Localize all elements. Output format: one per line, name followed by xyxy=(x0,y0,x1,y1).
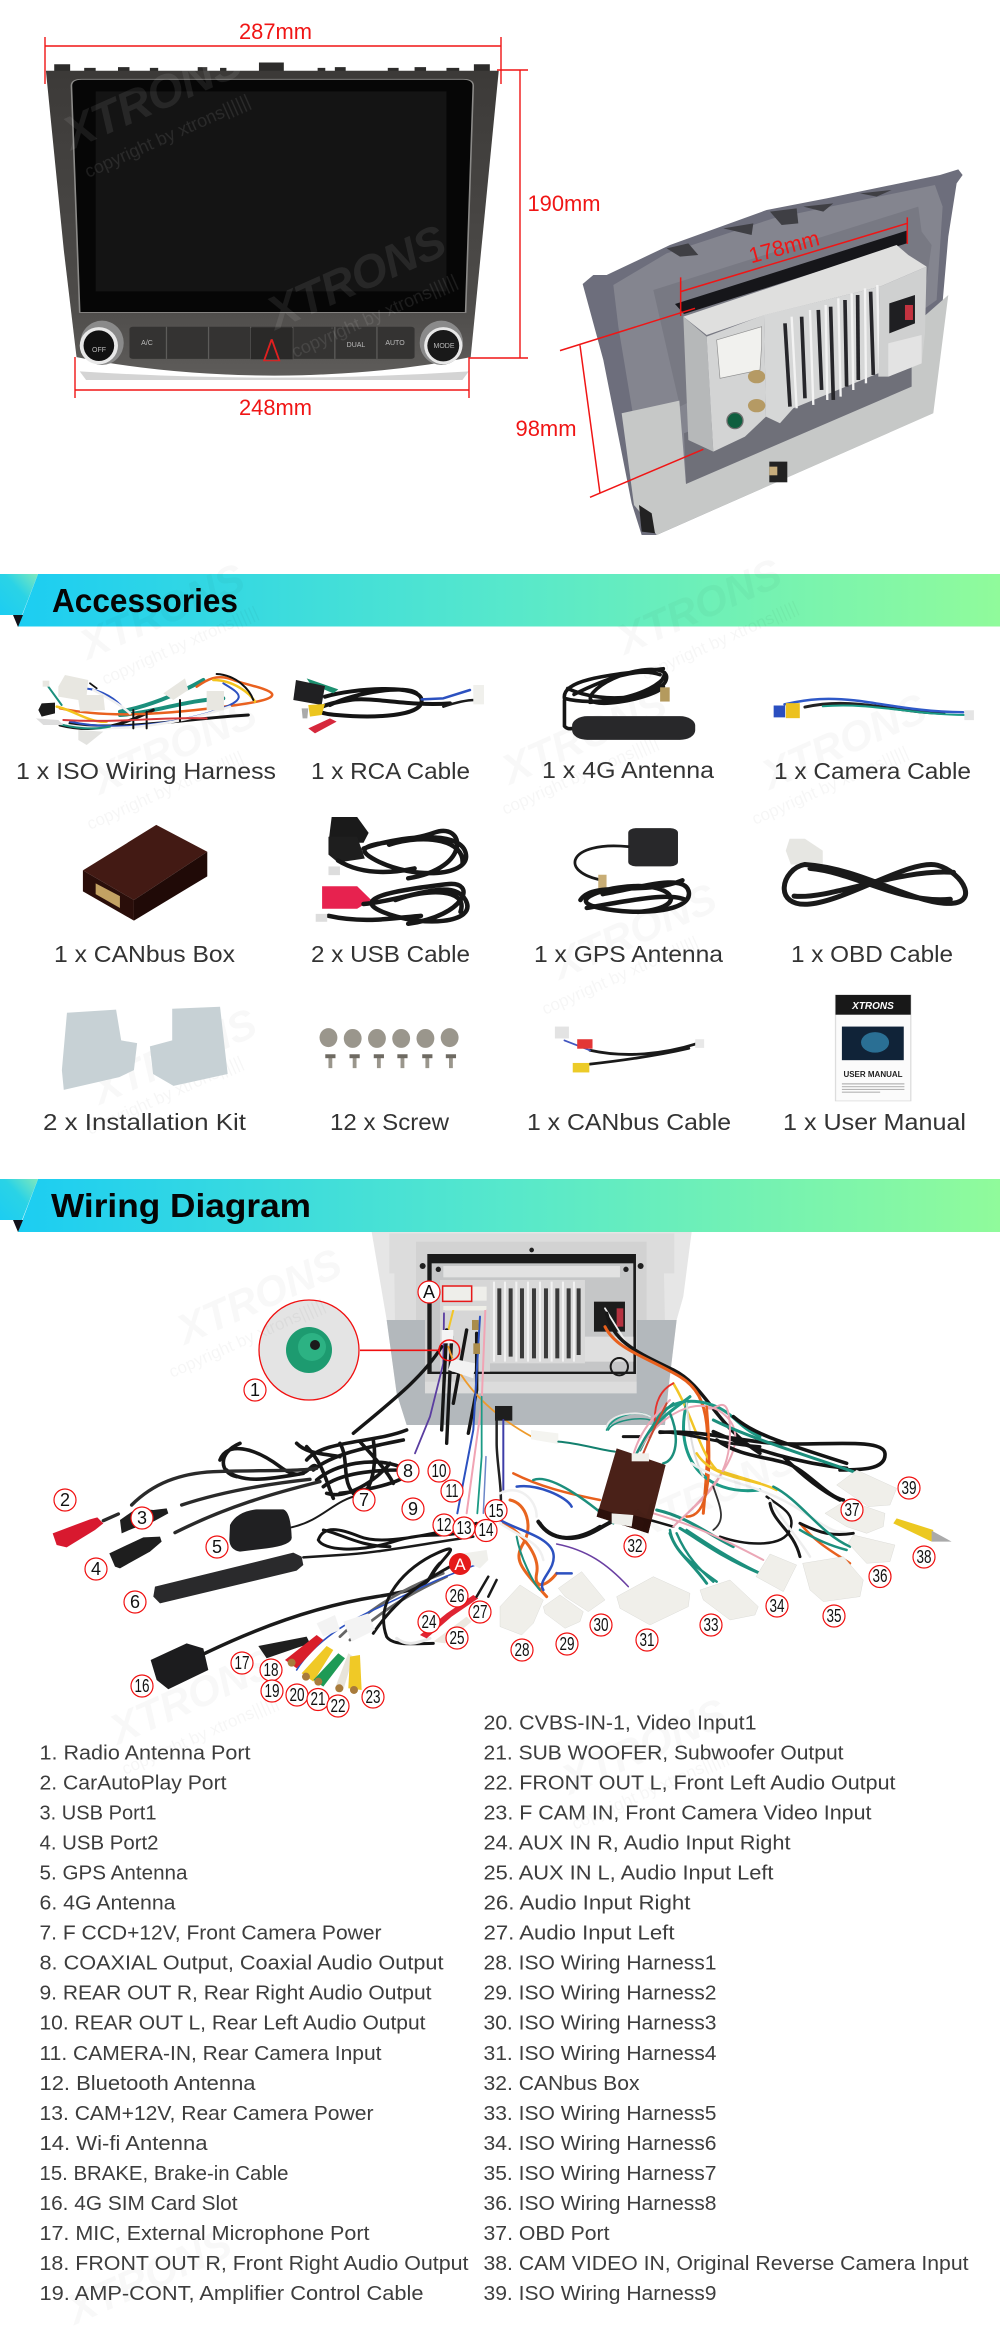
mid plate xyxy=(389,1233,674,1417)
parts list: column 1: 2. CarAutoPlay Port xyxy=(40,1772,227,1794)
numbered callouts: 4 xyxy=(91,1559,101,1579)
parts list: column 1: 9. REAR OUT R, Rear Right Audio Output xyxy=(40,1983,432,2005)
watermarks: accessories: copyright by xtrons|||||| xyxy=(84,1052,246,1139)
parts list: column 2: 35. ISO Wiring Harness7 xyxy=(484,2163,716,2185)
black cables xyxy=(540,1417,885,1538)
watermark: front view: copyright by xtrons|||||| xyxy=(288,271,460,362)
banner title: Accessories xyxy=(52,582,238,619)
user manual xyxy=(836,995,911,1101)
manual cover labels xyxy=(843,1001,903,1079)
watermarks: accessories: XTRONS xyxy=(543,874,724,989)
black coil xyxy=(220,1430,407,1498)
parts list: column 2: 30. ISO Wiring Harness3 xyxy=(484,2013,716,2035)
dimension: 248mm xyxy=(75,357,469,420)
watermarks: wiring: copyright by xtrons|||||| xyxy=(166,1295,328,1382)
thick cable xyxy=(538,1520,623,1538)
red rca xyxy=(285,1635,323,1668)
numbered callouts: 38 xyxy=(916,1547,932,1567)
ISO harness and RCA cable images xyxy=(36,674,484,745)
lower right fins xyxy=(585,1337,633,1362)
parts list: column 1: 8. COAXIAL Output, Coaxial Audio Output xyxy=(40,1953,444,1975)
left bracket xyxy=(387,1320,480,1425)
accessory labels: 1 x User Manual xyxy=(783,1109,966,1135)
watermarks: accessories: XTRONS xyxy=(83,689,264,804)
numbered callouts: 20 xyxy=(290,1685,304,1705)
outer frame xyxy=(372,1232,692,1425)
dimension: 98mm: 98mm xyxy=(516,416,576,441)
numbered callouts: 25 xyxy=(450,1628,464,1648)
parts list: column 2: 32. CANbus Box xyxy=(484,2073,640,2095)
wiring diagram: left cables xyxy=(53,1430,497,1694)
slot xyxy=(427,1254,636,1374)
green rca xyxy=(313,1653,345,1687)
watermarks: accessories: copyright by xtrons|||||| xyxy=(539,932,701,1019)
numbered callouts: 19 xyxy=(264,1681,280,1701)
parts list: column 1: 19. AMP-CONT, Amplifier Control Cable xyxy=(40,2283,424,2305)
ISO harness xyxy=(36,674,272,745)
wiring diagram: right harness xyxy=(500,1400,952,1635)
parts list: column 1: 17. MIC, External Microphone Port xyxy=(40,2223,370,2245)
control labels: DUAL xyxy=(347,342,365,349)
control labels: AUTO xyxy=(385,340,405,347)
numbered callouts xyxy=(54,1281,935,1717)
accessory labels: 1 x OBD Cable xyxy=(791,941,953,967)
dimension: 178mm: 178mm xyxy=(746,225,822,268)
watermarks: accessories: copyright by xtrons|||||| xyxy=(99,602,261,689)
numbered callouts: 34 xyxy=(770,1596,784,1616)
parts list: column 2: 26. Audio Input Right xyxy=(484,1893,691,1915)
USB cable 3 xyxy=(175,1482,320,1533)
black USB plug xyxy=(109,1537,162,1568)
rca tips xyxy=(288,1659,358,1694)
white connector xyxy=(463,1550,488,1568)
camera cable xyxy=(774,699,974,720)
white connectors xyxy=(500,1470,897,1635)
socket xyxy=(594,1302,625,1332)
parts list: column 2: 20. CVBS-IN-1, Video Input1 xyxy=(484,1712,756,1734)
black USB plug xyxy=(120,1508,168,1533)
parts list: column 2: 36. ISO Wiring Harness8 xyxy=(484,2193,716,2215)
power harness xyxy=(605,1308,627,1343)
numbered callouts: 27 xyxy=(472,1602,488,1622)
dimension: 190mm: 190mm xyxy=(528,191,600,216)
watermarks: accessories: XTRONS xyxy=(83,999,264,1114)
lower fins xyxy=(888,335,922,377)
port on band xyxy=(495,1406,512,1421)
banner fold xyxy=(13,1220,23,1232)
numbered callouts: 3 xyxy=(137,1508,147,1528)
watermarks: wiring: copyright by xtrons|||||| xyxy=(119,1692,281,1779)
inner frame xyxy=(613,185,943,480)
wiring diagram: rear of unit xyxy=(353,1232,760,1523)
mic plug xyxy=(258,1637,310,1658)
watermark: front view xyxy=(52,34,460,362)
screen display xyxy=(96,91,446,291)
control labels: A/C xyxy=(141,340,153,347)
module top xyxy=(683,245,927,335)
gold antenna ports xyxy=(748,370,765,412)
watermarks: wiring: copyright by xtrons|||||| xyxy=(569,1747,731,1834)
numbered callouts: 36 xyxy=(872,1566,888,1586)
parts list: column 2: 24. AUX IN R, Audio Input Right xyxy=(484,1833,791,1855)
parts list: column 1: 6. 4G Antenna xyxy=(40,1893,176,1915)
numbered callouts: A xyxy=(423,1282,435,1302)
numbered callouts: 14 xyxy=(478,1520,494,1540)
USB cable 1 xyxy=(103,1468,317,1521)
dimension: 287mm xyxy=(45,19,501,84)
control labels: MODE xyxy=(434,343,455,350)
accessory labels: 1 x RCA Cable xyxy=(311,758,470,784)
installation kit xyxy=(62,1007,228,1090)
CANbus box xyxy=(83,825,207,921)
parts list: column 1: 18. FRONT OUT R, Front Right Audio Output xyxy=(40,2253,469,2275)
accessory labels: 1 x ISO Wiring Harness xyxy=(16,758,276,784)
screws xyxy=(420,1248,644,1272)
parts list: column 2 xyxy=(484,1712,969,2305)
callout frame A xyxy=(443,1286,472,1301)
parts list: column 1: 4. USB Port2 xyxy=(40,1833,158,1855)
CANbus box xyxy=(597,1448,666,1533)
accessory labels: 1 x 4G Antenna xyxy=(542,757,714,783)
parts list: column 1: 3. USB Port1 xyxy=(40,1803,156,1825)
CANbus cable xyxy=(555,1027,704,1072)
labels xyxy=(317,1613,375,1642)
parts list: column 1: 13. CAM+12V, Rear Camera Power xyxy=(40,2103,374,2125)
banner flag xyxy=(0,1179,38,1220)
parts list: column 1 xyxy=(40,1742,469,2305)
accessory labels: 1 x GPS Antenna xyxy=(534,941,723,967)
watermarks: accessories: XTRONS xyxy=(608,549,789,664)
watermarks: accessories: copyright by xtrons|||||| xyxy=(499,732,661,819)
numbered callouts: 30 xyxy=(594,1615,608,1635)
bezel xyxy=(46,71,499,376)
SIM module xyxy=(151,1643,208,1689)
upper leads xyxy=(607,1413,650,1427)
numbered callouts: 33 xyxy=(704,1615,718,1635)
numbered callouts: 26 xyxy=(450,1586,464,1606)
magnifier leader xyxy=(360,1349,440,1351)
red USB plug xyxy=(53,1517,103,1547)
slot xyxy=(675,231,907,314)
connector block xyxy=(707,315,766,452)
right knob xyxy=(420,321,463,365)
accessory labels xyxy=(16,757,971,1135)
4G antenna xyxy=(153,1553,303,1603)
numbered callouts: 24 xyxy=(422,1612,436,1632)
banner flag xyxy=(0,574,38,615)
parts list: column 2: 38. CAM VIDEO IN, Original Reverse Camera Input xyxy=(484,2253,969,2275)
banner title: Wiring Diagram xyxy=(51,1187,311,1224)
heat sink xyxy=(490,1280,585,1363)
accessory labels: 1 x CANbus Cable xyxy=(527,1109,731,1135)
front view of head unit xyxy=(46,62,499,380)
block wiring xyxy=(415,1313,444,1453)
RCA cable xyxy=(293,678,484,733)
numbered callouts: 35 xyxy=(826,1606,842,1626)
green radio port xyxy=(727,413,743,429)
parts list: column 2: 39. ISO Wiring Harness9 xyxy=(484,2283,716,2305)
watermarks: accessories: copyright by xtrons|||||| xyxy=(749,742,911,829)
manual cover labels: USER MANUAL xyxy=(843,1070,903,1079)
numbered callouts: 8 xyxy=(403,1461,413,1481)
parts list: column 2: 34. ISO Wiring Harness6 xyxy=(484,2133,716,2155)
rear shell xyxy=(583,169,963,535)
watermarks: wiring: XTRONS xyxy=(101,1639,282,1754)
numbered callouts: A xyxy=(454,1555,466,1574)
ISO bundle xyxy=(503,1500,557,1597)
parts list: column 1: 12. Bluetooth Antenna xyxy=(40,2073,256,2095)
shadow xyxy=(80,371,469,380)
clips xyxy=(667,190,892,257)
watermarks: accessories: XTRONS xyxy=(493,679,674,794)
module side xyxy=(683,317,713,452)
numbered callouts: 29 xyxy=(560,1634,574,1654)
red switch xyxy=(889,295,915,333)
parts list: column 1: 5. GPS Antenna xyxy=(40,1863,188,1885)
inner plate xyxy=(416,1242,647,1382)
screws xyxy=(320,1028,459,1068)
heat sink xyxy=(764,287,880,423)
numbered callouts: 2 xyxy=(60,1490,70,1510)
mounting tabs xyxy=(54,62,490,71)
parts list: column 1: 16. 4G SIM Card Slot xyxy=(40,2193,238,2215)
banner: accessories xyxy=(0,574,1000,627)
parts list: column 2: 21. SUB WOOFER, Subwoofer Output xyxy=(484,1742,844,1764)
watermarks: accessories: copyright by xtrons|||||| xyxy=(84,747,246,834)
manual cover labels: XTRONS xyxy=(851,1001,894,1012)
numbered callouts: 7 xyxy=(359,1490,369,1510)
connector block xyxy=(440,1280,490,1372)
accessory labels: 2 x USB Cable xyxy=(311,941,470,967)
numbered callouts: 15 xyxy=(488,1501,504,1521)
parts list: column 1: 10. REAR OUT L, Rear Left Audio Output xyxy=(40,2013,426,2035)
control labels xyxy=(92,340,455,354)
numbered callouts: 12 xyxy=(436,1515,452,1535)
control labels: OFF xyxy=(92,347,106,354)
watermarks: wiring: XTRONS xyxy=(623,1434,804,1549)
USB cables xyxy=(316,817,467,924)
right section xyxy=(878,267,927,377)
parts list: column 2: 37. OBD Port xyxy=(484,2223,610,2245)
numbered callouts: 28 xyxy=(514,1640,530,1660)
control strip xyxy=(129,327,415,359)
banner fold xyxy=(13,615,23,627)
yellow rca xyxy=(302,1646,333,1682)
accessory labels: 1 x CANbus Box xyxy=(54,941,236,967)
numbered callouts: 32 xyxy=(628,1536,642,1556)
parts list: column 1: 7. F CCD+12V, Front Camera Power xyxy=(40,1923,382,1945)
aux plugs xyxy=(420,1595,478,1638)
dimension: 248mm: 248mm xyxy=(239,395,312,420)
right bracket xyxy=(470,1320,677,1425)
other accessory images xyxy=(62,669,974,1101)
screen glass xyxy=(71,79,473,312)
numbered callouts: 37 xyxy=(844,1500,860,1520)
OBD cable xyxy=(784,839,966,904)
left knob xyxy=(80,321,124,365)
numbered callouts: 31 xyxy=(640,1630,654,1650)
dimension lines xyxy=(560,217,907,497)
dark port xyxy=(769,462,787,482)
numbered callouts: 13 xyxy=(456,1518,472,1538)
recess plate xyxy=(653,207,932,407)
GPS puck xyxy=(229,1509,292,1552)
harness into box xyxy=(637,1403,673,1453)
parts list: column 2: 28. ISO Wiring Harness1 xyxy=(484,1953,716,1975)
numbered callouts: 16 xyxy=(134,1676,150,1696)
parts list: column 2: 27. Audio Input Left xyxy=(484,1923,675,1945)
4G antenna xyxy=(564,669,695,740)
numbered callouts: 6 xyxy=(130,1592,140,1612)
hazard icon xyxy=(264,339,279,361)
accessory labels: 1 x Camera Cable xyxy=(774,758,971,784)
parts list: column 2: 31. ISO Wiring Harness4 xyxy=(484,2043,716,2065)
watermark: front view: XTRONS xyxy=(52,34,250,160)
cable bundle xyxy=(340,1573,447,1640)
watermark: front view: XTRONS xyxy=(256,214,454,340)
magnifier: radio antenna port xyxy=(259,1300,359,1400)
parts list: column 2: 29. ISO Wiring Harness2 xyxy=(484,1983,716,2005)
numbered callouts: 17 xyxy=(234,1653,250,1673)
watermarks: wiring: XTRONS xyxy=(553,1689,734,1804)
parts list: column 1: 1. Radio Antenna Port xyxy=(40,1742,251,1764)
bracket xyxy=(622,295,948,535)
numbered callouts: 22 xyxy=(330,1696,346,1716)
teal cables xyxy=(657,1420,853,1583)
yellow RCA xyxy=(893,1518,933,1542)
numbered callouts: 18 xyxy=(264,1660,278,1680)
watermark: front view: copyright by xtrons|||||| xyxy=(81,91,253,182)
numbered callouts: 1 xyxy=(250,1380,260,1400)
banner: wiring diagram xyxy=(0,1179,1000,1232)
numbered callouts: 21 xyxy=(310,1689,326,1709)
parts list: column 2: 33. ISO Wiring Harness5 xyxy=(484,2103,716,2125)
leader ring xyxy=(439,1340,460,1361)
numbered callouts: 23 xyxy=(366,1687,380,1707)
GPS antenna xyxy=(575,828,689,912)
numbered callouts: 9 xyxy=(408,1499,418,1519)
watermarks: accessories: copyright by xtrons|||||| xyxy=(639,597,801,684)
numbered callouts: 11 xyxy=(446,1481,458,1501)
watermarks: wiring: XTRONS xyxy=(58,2219,239,2331)
white rca xyxy=(335,1653,353,1690)
rear view of head unit xyxy=(560,169,963,535)
dimension: 190mm xyxy=(469,70,600,358)
module xyxy=(432,1263,633,1372)
parts list: column 1: 15. BRAKE, Brake-in Cable xyxy=(40,2163,288,2185)
yellow rca xyxy=(348,1655,362,1690)
parts list: column 1: 11. CAMERA-IN, Rear Camera Input xyxy=(40,2043,382,2065)
accessory labels: 12 x Screw xyxy=(330,1109,449,1135)
watermarks: accessories: XTRONS xyxy=(71,554,252,669)
watermarks: wiring: XTRONS xyxy=(168,1239,349,1354)
watermarks: accessories xyxy=(71,549,934,1139)
parts list: column 2: 25. AUX IN L, Audio Input Left xyxy=(484,1863,774,1885)
accessory labels: 2 x Installation Kit xyxy=(43,1109,247,1135)
watermarks: accessories: XTRONS xyxy=(753,684,934,799)
numbered callouts: 5 xyxy=(212,1537,222,1557)
parts list: column 2: 22. FRONT OUT L, Front Left Audio Output xyxy=(484,1772,896,1794)
dimension: 287mm: 287mm xyxy=(239,19,312,44)
numbered callouts: 39 xyxy=(902,1478,916,1498)
watermarks: wiring xyxy=(58,1239,804,2331)
parts list: column 2: 23. F CAM IN, Front Camera Video Input xyxy=(484,1803,872,1825)
USB cable 2 xyxy=(182,1479,310,1505)
parts list: column 1: 14. Wi-fi Antenna xyxy=(40,2133,208,2155)
numbered callouts: 10 xyxy=(432,1461,446,1481)
hole backing xyxy=(684,347,912,484)
